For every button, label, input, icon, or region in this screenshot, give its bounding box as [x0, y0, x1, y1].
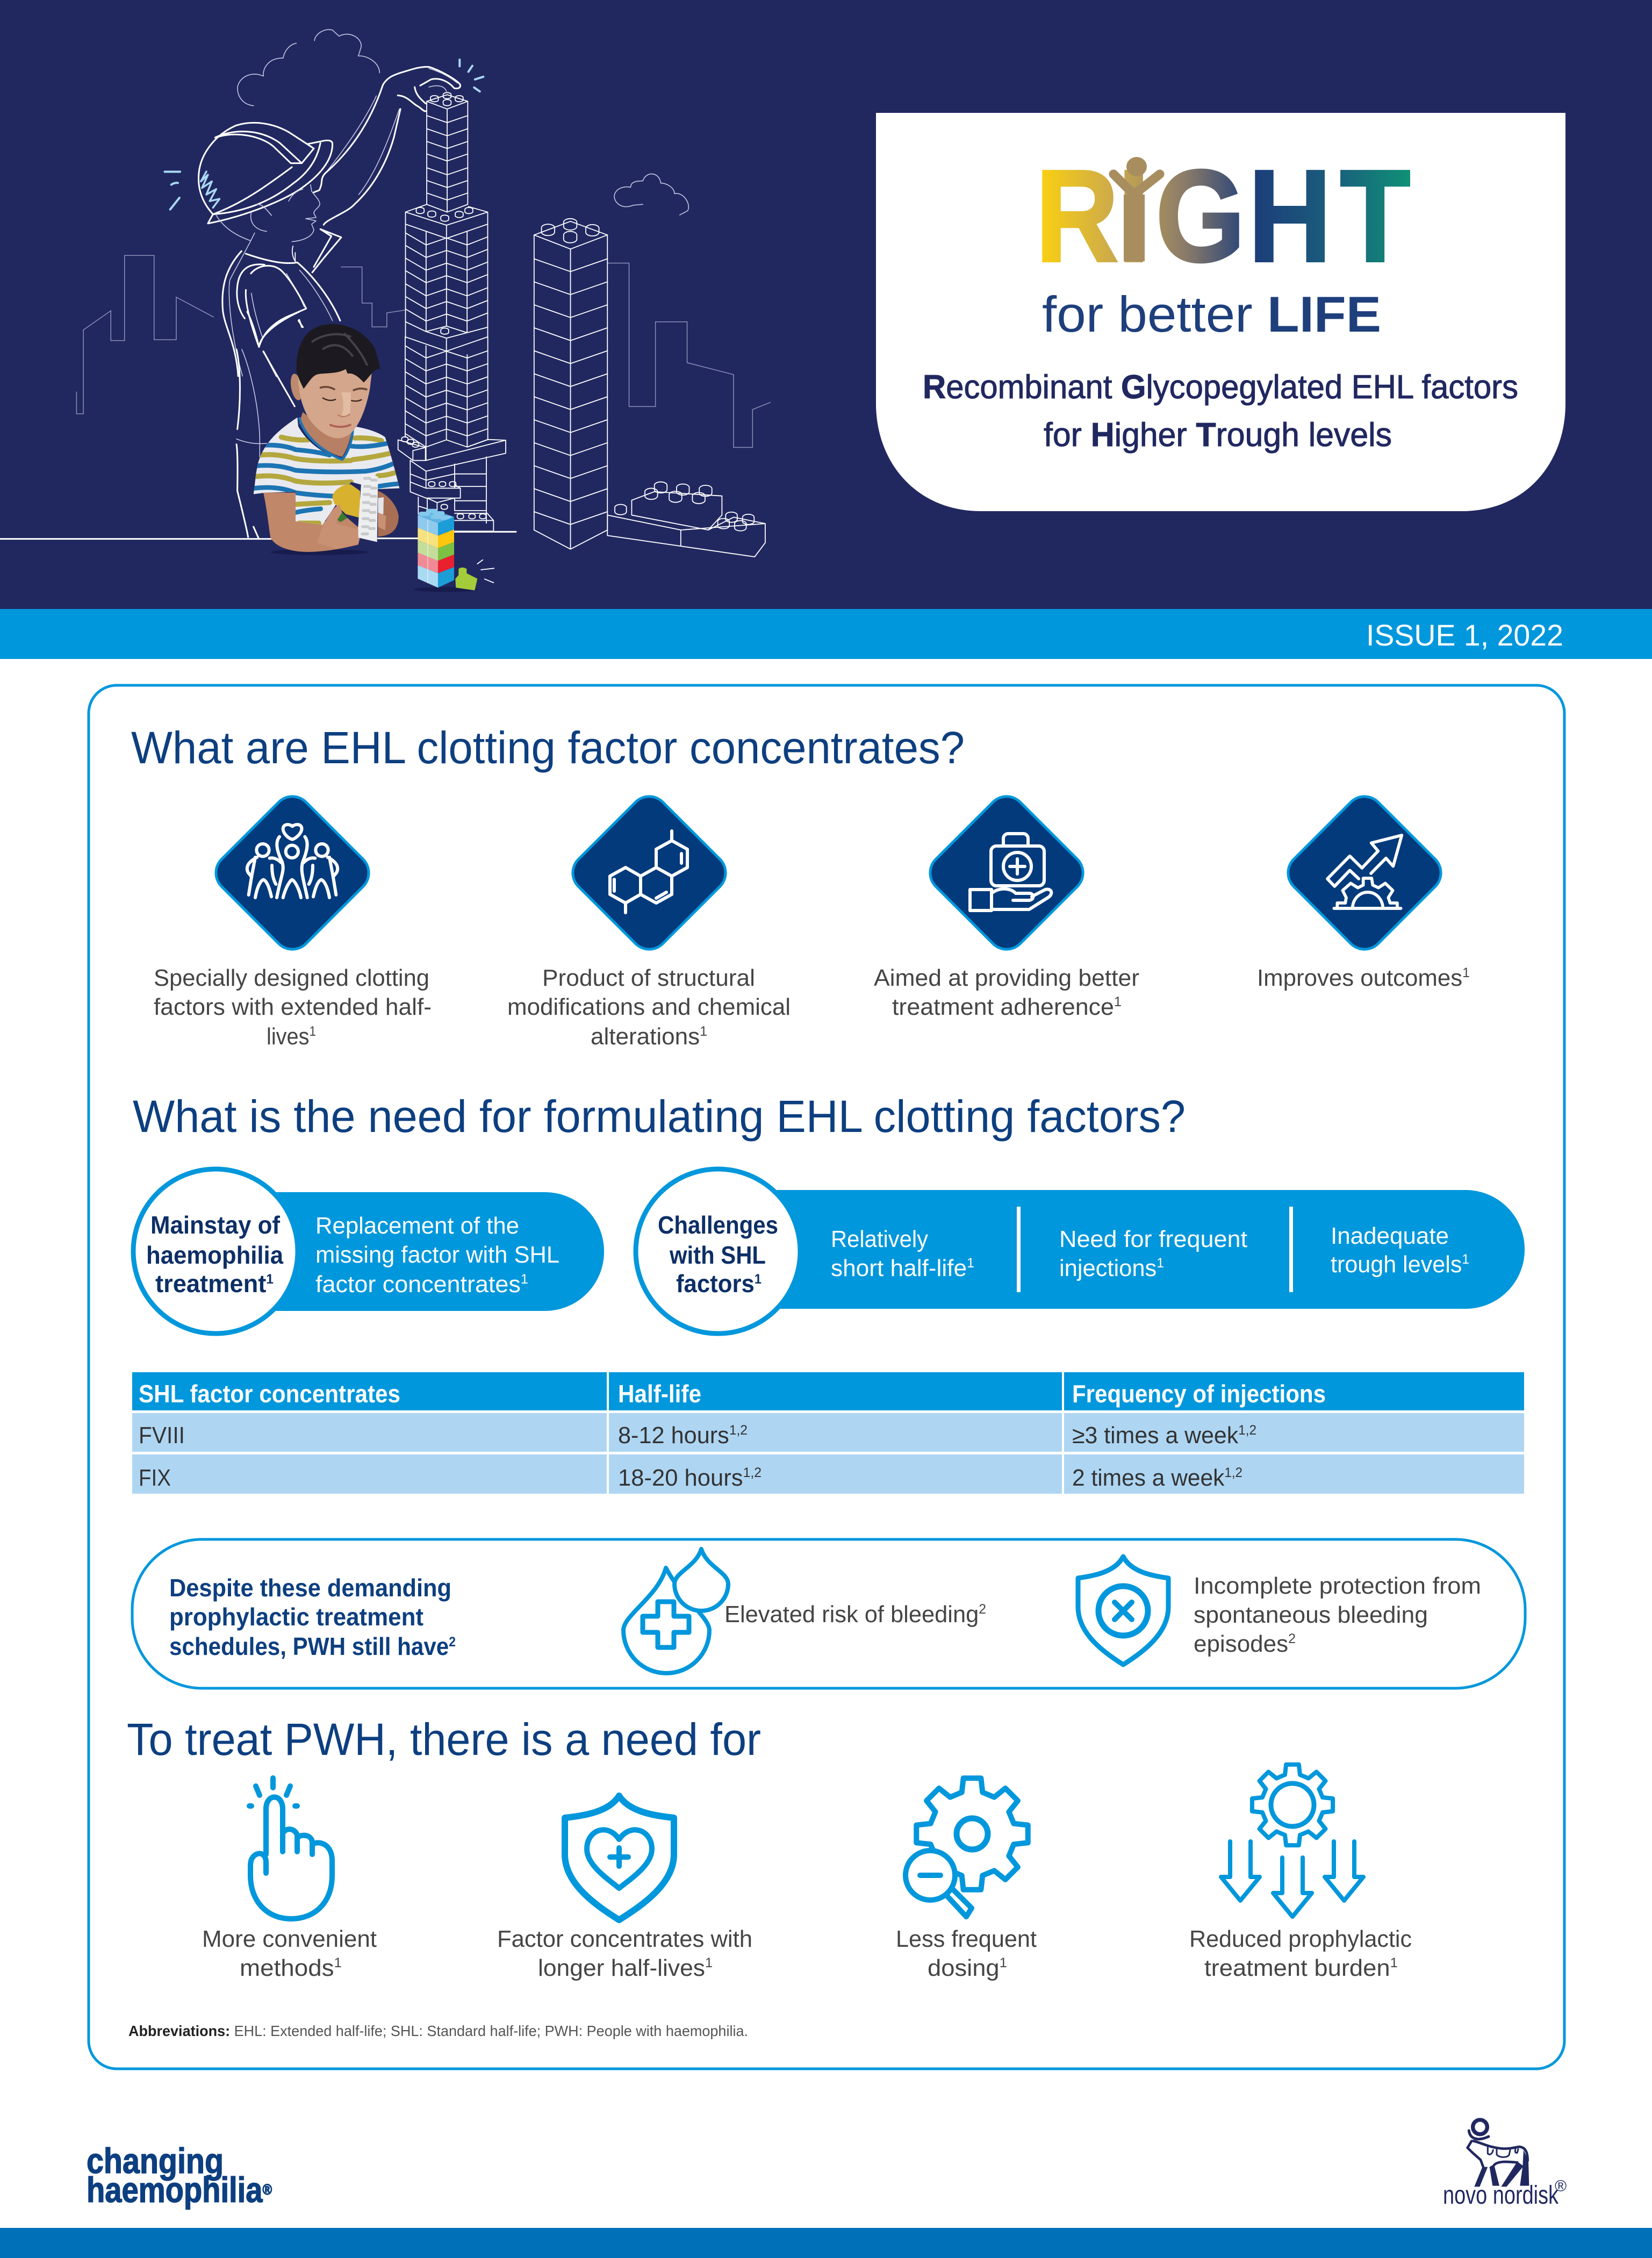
callout text: Despite these demanding — [169, 1574, 451, 1602]
heading: what are EHL: What are EHL clotting factor concentrates? — [131, 722, 965, 773]
caption: 1 — [309, 1024, 316, 1039]
toy in hands — [378, 497, 384, 514]
challenge: trough: 1 — [1462, 1252, 1469, 1267]
icon: tapping hand — [249, 1778, 332, 1919]
caption: 1 — [700, 1024, 707, 1039]
wordmark: novo nordisk — [1443, 2181, 1559, 2210]
caption: dosing — [928, 1955, 997, 1981]
circle label: with SHL — [669, 1241, 766, 1269]
caption: lives — [267, 1023, 314, 1050]
abbreviations: Abbreviations: EHL: Extended half-life; SHL: Standard half-life; PWH: People with haemophilia. — [128, 2023, 748, 2039]
challenge: trough: trough levels — [1331, 1251, 1464, 1278]
table: SHL factor concentrates: FIX — [139, 1465, 171, 1491]
caption — [154, 965, 432, 1050]
circle label: 1 — [266, 1272, 274, 1287]
worker helmet — [165, 60, 483, 224]
bottom band — [0, 2228, 1652, 2258]
icon: gear with down arrows — [1221, 1765, 1363, 1917]
worker face — [216, 68, 457, 376]
table: SHL factor concentrates: 1,2 — [743, 1465, 762, 1480]
caption: Aimed at providing better — [874, 965, 1139, 991]
title card — [876, 113, 1565, 511]
item: longer half-lives — [497, 1796, 752, 1981]
table: SHL factor concentrates: 8-12 hours — [618, 1422, 731, 1449]
circle label: Mainstay of — [150, 1211, 281, 1239]
protection text: 2 — [1288, 1631, 1296, 1646]
item: reduced burden — [1189, 1765, 1412, 1981]
logo: changing haemophilia: ® — [262, 2181, 272, 2198]
skyline outlines — [76, 255, 771, 447]
risk text: 2 — [979, 1602, 986, 1617]
logo: novo nordisk — [1443, 2120, 1567, 2210]
subtitle — [923, 369, 1518, 454]
caption: alterations — [591, 1023, 700, 1050]
RIGHT logo: H — [1248, 142, 1332, 289]
RIGHT logo — [1036, 142, 1411, 289]
RIGHT logo: T — [1340, 142, 1411, 289]
pill text: Replacement of the — [315, 1213, 519, 1239]
caption — [507, 965, 791, 1050]
challenge: injections: injections — [1059, 1255, 1158, 1281]
challenge: injections: 1 — [1157, 1256, 1164, 1271]
table: SHL factor concentrates: ≥3 times a week — [1072, 1422, 1243, 1449]
large cloud — [238, 30, 379, 106]
callout text — [169, 1574, 456, 1660]
pill: mainstay of treatment — [133, 1169, 604, 1334]
circle label — [146, 1211, 283, 1298]
RIGHT logo: R — [1036, 142, 1119, 289]
circle label — [658, 1211, 778, 1298]
heading: to treat PWH: To treat PWH, there is a need for — [127, 1714, 761, 1765]
caption: longer half-lives — [538, 1955, 703, 1981]
table: SHL factor concentrates: 1,2 — [729, 1423, 748, 1438]
caption: 1 — [1462, 965, 1470, 980]
table: SHL factor concentrates: 2 times a week — [1072, 1465, 1230, 1491]
protection text — [1194, 1573, 1481, 1657]
card: adherence — [874, 788, 1139, 1020]
small cloud — [614, 174, 688, 215]
protection text: episodes — [1194, 1631, 1288, 1657]
callout text: 2 — [449, 1635, 456, 1650]
challenge: half-life: short half-life — [831, 1255, 966, 1281]
worker torso — [222, 229, 341, 376]
icon: shield with cross — [1078, 1557, 1168, 1665]
table: SHL factor concentrates: 1,2 — [1224, 1465, 1242, 1480]
pill text: missing factor with SHL — [315, 1242, 559, 1268]
caption: Reduced prophylactic — [1189, 1926, 1412, 1952]
RIGHT logo: I — [1118, 142, 1150, 289]
hero illustration: worker, cloud and upper towers — [165, 30, 488, 376]
hero background — [0, 0, 1652, 609]
tagline: for better LIFE — [1042, 286, 1381, 342]
caption: More convenient — [202, 1926, 377, 1952]
logo: changing haemophilia: haemophilia — [87, 2170, 293, 2210]
caption — [1189, 1926, 1412, 1981]
risk text: Elevated risk of bleeding — [724, 1601, 982, 1628]
icon: molecule — [610, 831, 687, 913]
caption: treatment adherence — [892, 994, 1110, 1020]
tower base bricks — [398, 437, 506, 531]
challenge: trough: Inadequate — [1331, 1223, 1449, 1249]
main content panel — [89, 685, 1564, 2069]
caption: 1 — [334, 1955, 342, 1970]
item: convenient methods — [202, 1778, 377, 1981]
logo: novo nordisk: ® — [1555, 2177, 1567, 2195]
card: outcomes — [1257, 788, 1470, 991]
icon: medical kit on hand — [970, 834, 1051, 911]
icon: apis bull — [1468, 2120, 1529, 2187]
caption: modifications and chemical — [507, 994, 791, 1020]
stacked toy bricks — [418, 510, 494, 590]
icon: rising arrow with gear — [1327, 835, 1402, 908]
icon: blood drops with cross — [623, 1549, 728, 1673]
pill text — [315, 1213, 559, 1298]
tower 3 — [534, 219, 607, 549]
caption: Factor concentrates with — [497, 1926, 752, 1952]
caption: 1 — [1390, 1955, 1398, 1970]
table: SHL factor concentrates: Half-life — [618, 1380, 701, 1408]
caption — [896, 1926, 1037, 1981]
table: SHL factor concentrates: 18-20 hours — [618, 1465, 744, 1491]
caption: Improves outcomes — [1257, 965, 1463, 991]
icon: gear with magnifier — [906, 1778, 1028, 1917]
caption — [202, 1926, 377, 1981]
RIGHT logo: G — [1155, 142, 1245, 289]
subtitle: for Higher Trough levels — [1044, 417, 1392, 454]
challenge: half-life: 1 — [967, 1256, 974, 1271]
circle label: haemophilia — [146, 1241, 283, 1269]
worker arm and hand — [314, 67, 461, 225]
callout text: schedules, PWH still have — [169, 1632, 475, 1660]
icon: shield with heart — [565, 1796, 674, 1920]
challenge: half-life — [831, 1226, 974, 1281]
protection text: Incomplete protection from — [1194, 1573, 1481, 1599]
table: SHL factor concentrates: SHL factor concentrates — [139, 1380, 400, 1408]
circle label: treatment — [155, 1270, 268, 1298]
neck — [299, 412, 353, 457]
caption: factors with extended half- — [154, 994, 432, 1020]
card: product of modifications — [507, 788, 791, 1050]
issue band — [0, 609, 1652, 659]
caption: 1 — [1000, 1955, 1007, 1970]
four EHL feature cards — [154, 788, 1470, 1050]
card: specially designed — [154, 788, 432, 1050]
pill: challenges with SHL factors — [636, 1169, 1525, 1334]
caption: 1 — [705, 1955, 713, 1970]
challenge: half-life: Relatively — [831, 1226, 928, 1252]
callout text: prophylactic treatment — [169, 1603, 423, 1631]
face — [289, 373, 304, 401]
challenge: injections — [1059, 1226, 1247, 1281]
hair — [297, 324, 380, 389]
caption: treatment burden — [1204, 1955, 1384, 1981]
challenge: injections: Need for frequent — [1059, 1226, 1247, 1252]
table: SHL factor concentrates: 1,2 — [1238, 1423, 1256, 1438]
circle label: 1 — [755, 1272, 762, 1287]
circle label: Challenges — [658, 1211, 778, 1239]
child — [251, 324, 478, 592]
pill text: 1 — [521, 1272, 528, 1287]
ground line — [0, 532, 516, 539]
fallen bricks — [607, 482, 765, 557]
icon: people group — [247, 825, 337, 898]
hero illustration: child, toy blocks and tower base — [0, 312, 516, 592]
challenge: trough — [1331, 1223, 1469, 1278]
caption: methods — [240, 1955, 331, 1981]
item: less frequent dosing — [896, 1778, 1037, 1981]
tower 2 upper — [406, 204, 488, 338]
caption: Specially designed clotting — [154, 965, 429, 991]
caption: Product of structural — [542, 965, 755, 991]
caption: Less frequent — [896, 1926, 1037, 1952]
circle label: factors — [676, 1270, 758, 1298]
subtitle: Recombinant Glycopegylated EHL factors — [923, 369, 1518, 406]
caption — [874, 965, 1139, 1020]
tower 2 lower — [405, 337, 488, 461]
caption — [497, 1926, 752, 1981]
tower 1 — [427, 92, 468, 212]
hero illustration: skyline, third tower and fallen bricks — [76, 174, 771, 557]
callout: PWH still have — [132, 1539, 1525, 1688]
pill text: factor concentrates — [315, 1271, 516, 1298]
logo: changing haemophilia: changing — [87, 2141, 224, 2181]
table: SHL factor concentrates — [132, 1372, 1524, 1494]
logo: changing haemophilia — [87, 2141, 272, 2210]
issue label: ISSUE 1, 2022 — [1366, 618, 1563, 652]
heading: need for EHL: What is the need for formulating EHL clotting factors? — [133, 1091, 1186, 1142]
protection text: spontaneous bleeding — [1194, 1602, 1428, 1628]
table: SHL factor concentrates: Frequency of injections — [1072, 1380, 1326, 1408]
table: SHL factor concentrates: FVIII — [139, 1422, 185, 1449]
caption: 1 — [1114, 994, 1122, 1009]
worker lower body — [236, 312, 302, 539]
shirt — [251, 414, 405, 527]
